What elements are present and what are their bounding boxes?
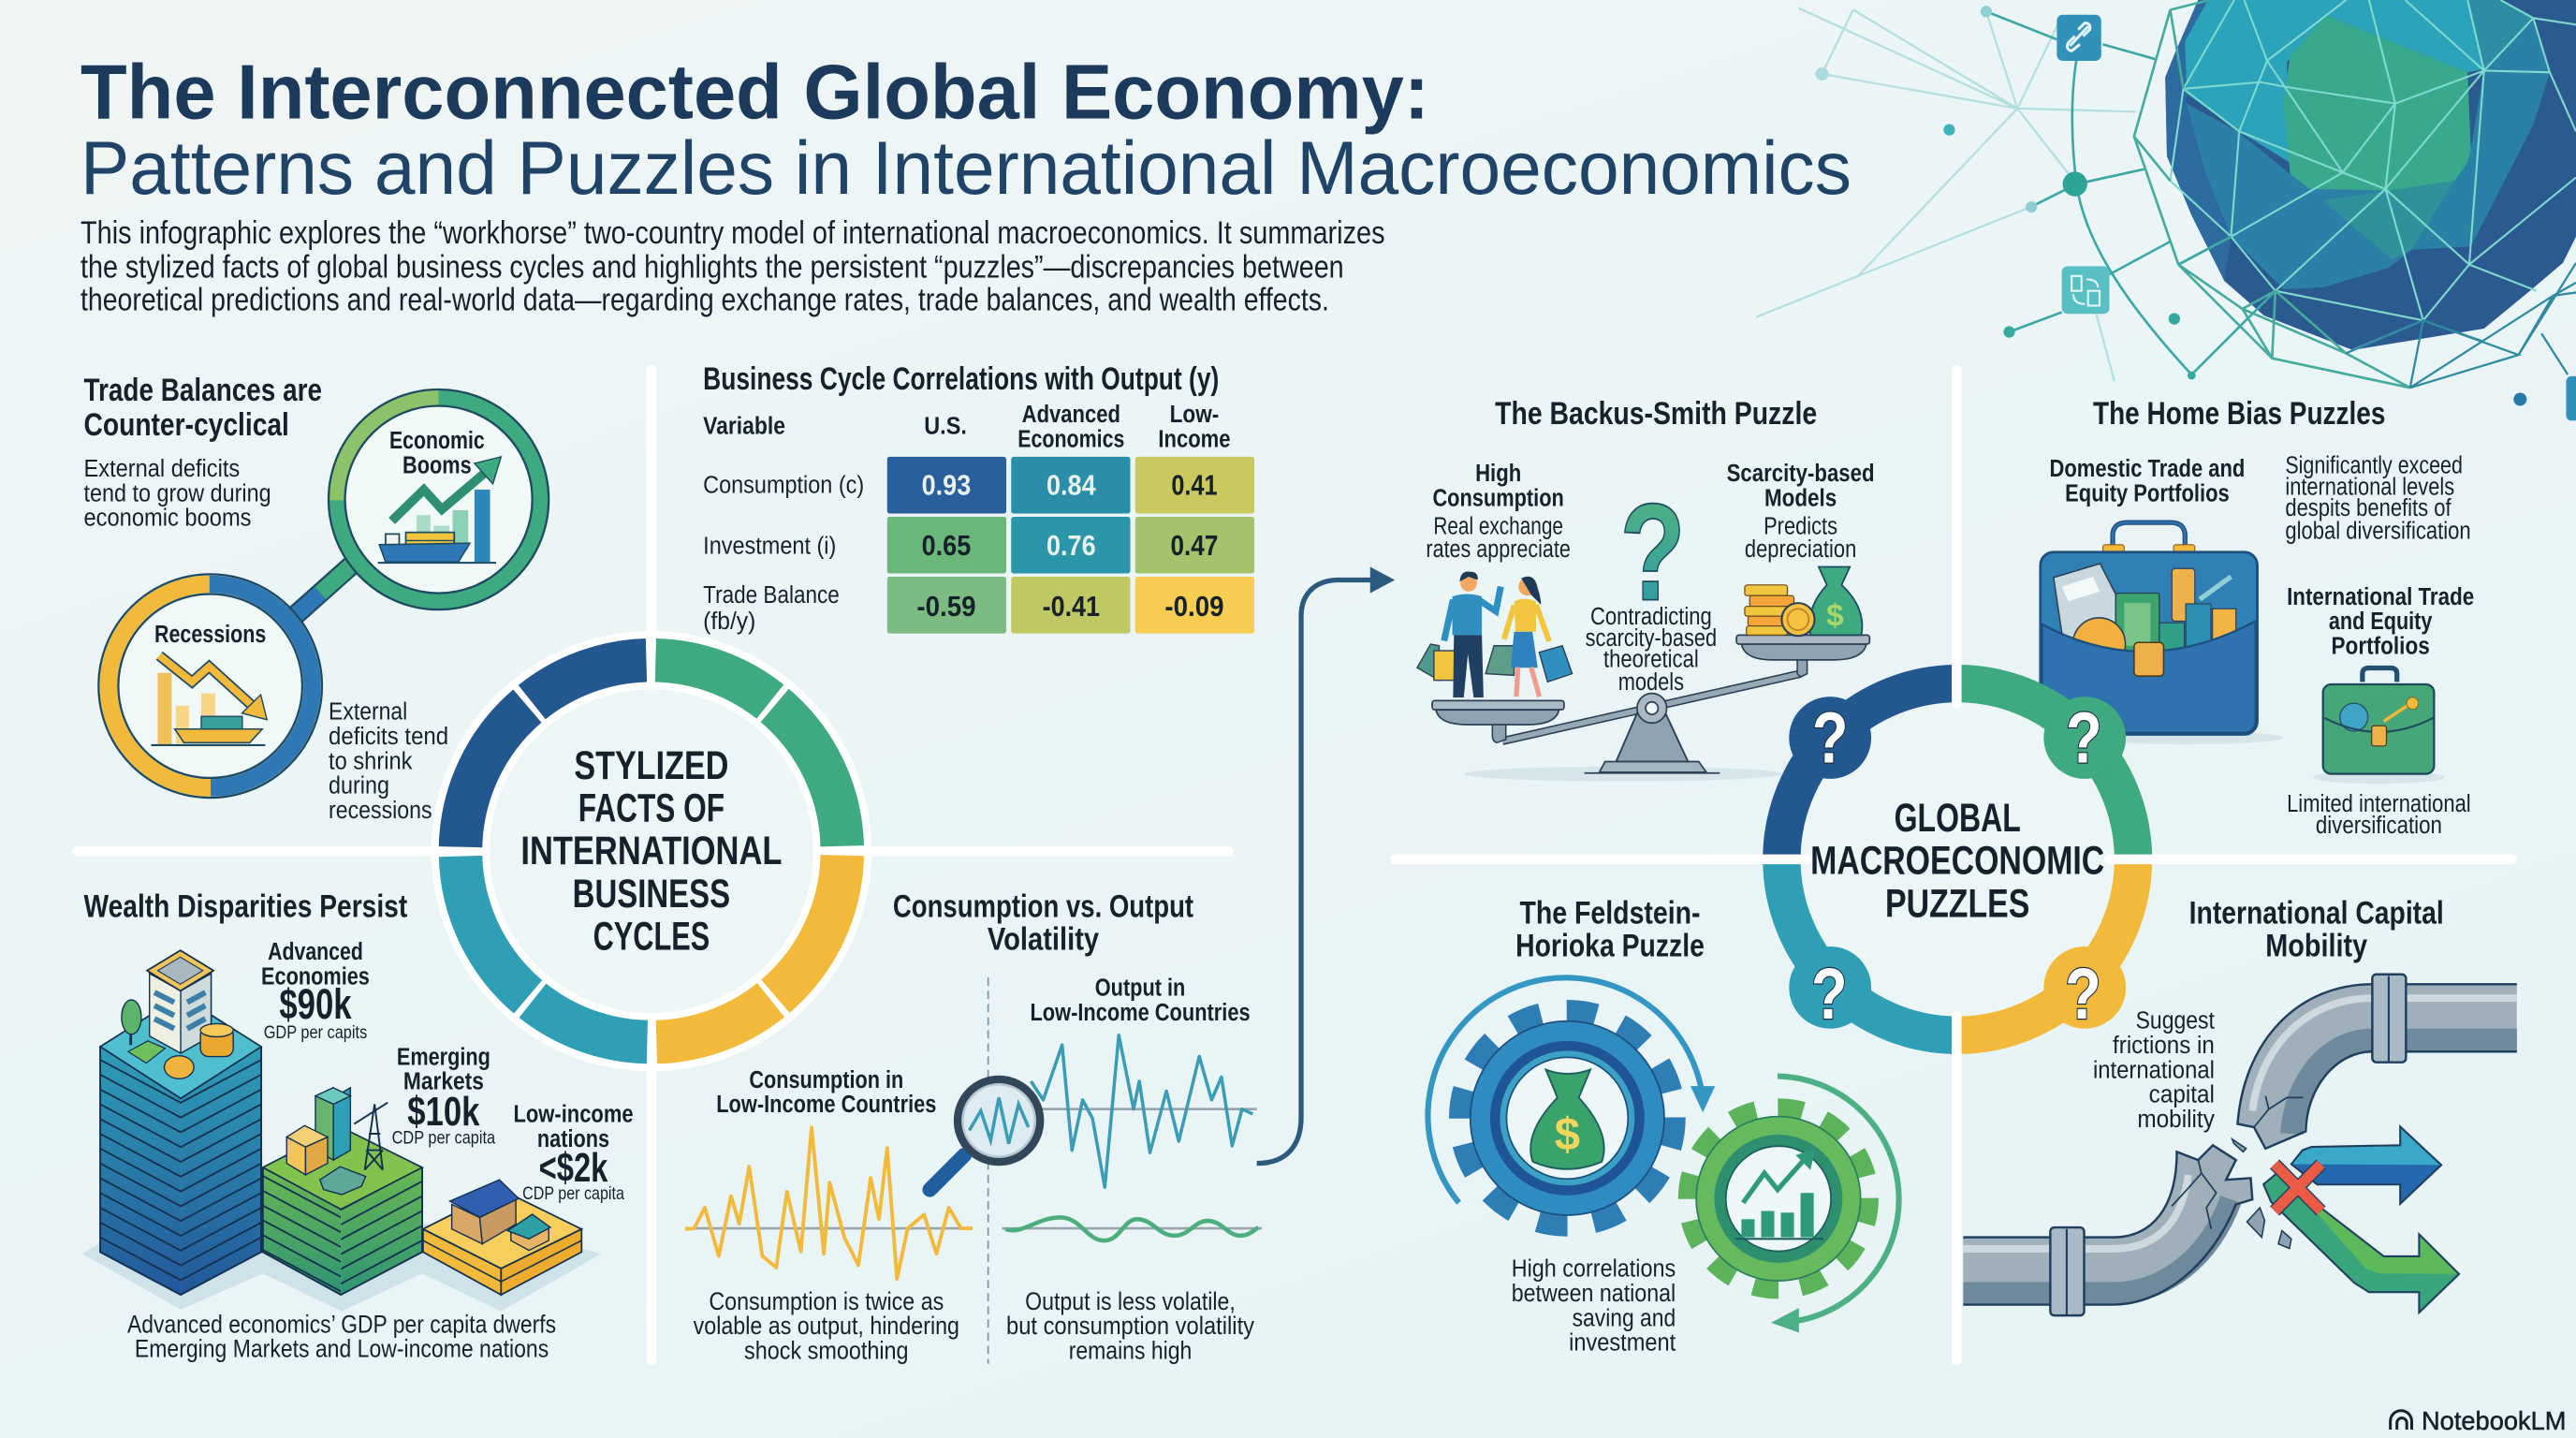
chart: low volatility line: [1003, 1217, 1262, 1240]
puzzle bubble: top right: ?: [2066, 697, 2102, 778]
text: significantly exceed: despits benefits of: [2285, 493, 2452, 521]
text: suggest frictions: Suggest: [2136, 1006, 2215, 1034]
text: high correlations: High correlations: [1512, 1255, 1676, 1283]
logo: notebooklm: NotebookLM: [2422, 1406, 2566, 1435]
mesh lines over globe: [2170, 0, 2576, 350]
arrow: green flow: [2263, 1173, 2459, 1313]
heading: [84, 373, 322, 443]
icon: upper pipe: [2237, 975, 2517, 1149]
ring title: global puzzles: [1810, 796, 2104, 926]
table row: trade balance: -0.41: [1043, 590, 1100, 623]
icon: broken fragments: [2232, 1139, 2291, 1249]
network lines near nodes: [1986, 11, 2276, 374]
text: limited diversification: [2287, 789, 2471, 839]
label: low income: [513, 1100, 634, 1204]
heading: [2189, 895, 2444, 963]
text: suggest frictions: mobility: [2137, 1105, 2216, 1133]
text: high consumption: rates appreciate: [1426, 535, 1571, 563]
heading: Horioka Puzzle: [1515, 928, 1705, 963]
panel: home bias puzzles: [2041, 396, 2474, 839]
text: contradicting: models: [1618, 668, 1684, 696]
ring: global puzzles: [1781, 683, 2133, 1035]
heading: The Home Bias Puzzles: [2093, 396, 2385, 432]
panel: wealth disparities: [82, 888, 634, 1363]
tower: advanced economies: [100, 950, 261, 1295]
label: emerging markets: Markets: [403, 1067, 484, 1095]
table header: Variable: [703, 411, 785, 439]
arrow: blue flow: [2291, 1126, 2441, 1204]
text: booms note: tend to grow during: [84, 478, 271, 506]
heading: The Feldstein-: [1519, 895, 1701, 931]
icon: blue gear with money bag: $: [1555, 1110, 1580, 1161]
caption: output: [1006, 1286, 1254, 1364]
ring title: STYLIZED: [574, 743, 728, 788]
table row: consumption: [703, 457, 1254, 513]
title: Patterns and Puzzles in International Macroeconomics: [80, 126, 1852, 211]
text: recessions note: recessions: [329, 796, 432, 824]
table row: trade balance: Trade Balance: [703, 580, 840, 609]
globe: [2165, 0, 2576, 350]
text: recessions note: deficits tend: [329, 722, 448, 750]
text: limited diversification: diversification: [2316, 811, 2442, 839]
intro text: theoretical predictions and real-world data—regarding exchange rates, trade balances, and wealth effects.: [80, 283, 1329, 318]
text: scarcity models: depreciation: [1745, 535, 1856, 563]
text: domestic portfolios: Equity Portfolios: [2065, 478, 2230, 506]
text: booms note: [84, 454, 271, 532]
table row: investment: 0.76: [1046, 529, 1096, 562]
text: recessions note: during: [329, 771, 389, 800]
label: consumption: Consumption in: [749, 1065, 903, 1093]
text: scarcity models: Scarcity-based: [1727, 459, 1875, 487]
table row: consumption: Consumption (c): [703, 471, 864, 499]
text: scarcity models: [1727, 459, 1875, 563]
ring: stylized facts: [382, 582, 920, 1121]
text: international portfolios: [2287, 582, 2474, 660]
icon: question mark: ?: [1620, 477, 1686, 630]
heading: Mobility: [2265, 928, 2367, 963]
ring title: global puzzles: MACROECONOMIC: [1810, 839, 2104, 884]
text: significantly exceed: [2285, 450, 2471, 545]
text: high consumption: High: [1475, 459, 1521, 487]
title: [80, 49, 1852, 211]
text: international portfolios: International Trade: [2287, 582, 2474, 610]
heading: The Backus-Smith Puzzle: [1495, 396, 1817, 432]
caption: output: Output is less volatile,: [1025, 1286, 1236, 1315]
heading: [1515, 895, 1705, 963]
chart: output line: [1031, 1035, 1257, 1187]
text: suggest frictions: capital: [2149, 1080, 2215, 1108]
text: significantly exceed: Significantly exceed: [2285, 450, 2463, 478]
text: high consumption: [1426, 459, 1571, 563]
caption: Advanced economics’ GDP per capita dwerfs: [127, 1309, 556, 1338]
intro text: the stylized facts of global business cycles and highlights the persistent “puzzles”—discrepancies between: [80, 250, 1344, 286]
table header: Advanced: [1022, 400, 1120, 428]
icon: small briefcase: [2313, 668, 2445, 784]
caption: output: but consumption volatility: [1006, 1311, 1254, 1340]
network node dots: [1815, 6, 2526, 406]
intro text: [80, 215, 1385, 318]
heading: Wealth Disparities Persist: [84, 888, 407, 924]
caption: [127, 1309, 556, 1363]
label: advanced economies: Economies: [261, 961, 370, 990]
table header: [703, 400, 1231, 452]
puzzle bubble: top left: ?: [1812, 697, 1848, 778]
panel: correlations table: [703, 361, 1254, 635]
caption: consumption: [694, 1286, 959, 1364]
heading: Counter-cyclical: [84, 407, 289, 443]
connector: [292, 564, 353, 618]
text: recessions note: to shrink: [329, 746, 413, 774]
icon: red x: [2275, 1164, 2321, 1211]
ring title: INTERNATIONAL: [520, 829, 782, 873]
heading: Consumption vs. Output: [893, 888, 1193, 924]
table row: investment: [703, 517, 1254, 574]
icon: coins and money bag: $: [1826, 599, 1844, 634]
text: suggest frictions: [2093, 1006, 2216, 1133]
label: low income: <$2k: [539, 1145, 608, 1191]
label: emerging markets: Emerging: [397, 1042, 490, 1070]
title: The Interconnected Global Economy:: [80, 49, 1429, 135]
label: advanced economies: [261, 937, 370, 1043]
table row: trade balance: -0.09: [1164, 590, 1224, 623]
heading: Business Cycle Correlations with Output (y): [703, 361, 1219, 397]
label: low income: CDP per capita: [522, 1184, 624, 1204]
ring title: global puzzles: PUZZLES: [1885, 881, 2029, 926]
text: international portfolios: and Equity: [2329, 607, 2433, 635]
intro text: This infographic explores the “workhorse” two-country model of international macroeconomics. It summarizes: [80, 215, 1385, 251]
caption: consumption: shock smoothing: [744, 1335, 909, 1364]
caption: output: remains high: [1069, 1335, 1192, 1364]
text: high correlations: between national: [1512, 1279, 1676, 1307]
text: scarcity models: Models: [1764, 484, 1837, 512]
label: Economic: [389, 426, 485, 454]
label: output: [1030, 974, 1251, 1026]
puzzle bubble: bottom left: ?: [1811, 954, 1848, 1034]
label: consumption: Low-Income Countries: [716, 1090, 936, 1118]
chart: consumption line: [685, 1127, 973, 1279]
text: contradicting: scarcity-based: [1586, 624, 1717, 652]
label: emerging markets: [392, 1042, 495, 1149]
text: recessions note: External: [329, 697, 407, 726]
icon: city and pylon: [286, 1088, 388, 1195]
icon: coins and money bag: [1745, 567, 1862, 636]
panel: feldstein-horioka puzzle: [1427, 895, 1899, 1357]
label: emerging markets: $10k: [407, 1089, 480, 1135]
faint network lines: [1756, 8, 2136, 381]
text: booms note: External deficits: [84, 454, 240, 482]
label: advanced economies: Advanced: [268, 937, 363, 965]
text: suggest frictions: international: [2093, 1055, 2215, 1083]
icon: ship and rising chart: [378, 457, 501, 563]
label: Booms: [402, 450, 472, 478]
label: emerging markets: CDP per capita: [392, 1129, 495, 1149]
table row: consumption: 0.93: [922, 468, 971, 501]
puzzle bubble: top right: [2043, 697, 2126, 779]
caption: Emerging Markets and Low-income nations: [135, 1334, 549, 1363]
caption: consumption: volable as output, hindering: [694, 1311, 959, 1340]
text: contradicting: theoretical: [1603, 645, 1699, 673]
icon: ship and falling chart: [151, 655, 267, 745]
text: domestic portfolios: [2049, 454, 2245, 506]
text: high correlations: investment: [1569, 1328, 1676, 1357]
table row: trade balance: [703, 577, 1254, 635]
puzzle bubble: bottom left: [1789, 946, 1871, 1034]
icon: edge tile: [2566, 376, 2576, 420]
text: high correlations: saving and: [1573, 1303, 1676, 1331]
table header: Income: [1158, 424, 1231, 452]
heading: Volatility: [988, 921, 1099, 957]
table row: trade balance: (fb/y): [703, 607, 755, 635]
text: significantly exceed: global diversification: [2285, 517, 2471, 545]
table row: consumption: 0.41: [1171, 468, 1218, 501]
label: Recessions: [154, 620, 266, 648]
heading: Trade Balances are: [84, 373, 322, 408]
mesh lines outer: [2134, 0, 2410, 388]
heading: [893, 888, 1193, 957]
panel: consumption vs output volatility: [685, 888, 1262, 1364]
icon: magnifier: [929, 1079, 1040, 1190]
icon: lower pipe: [1963, 1145, 2252, 1315]
ring title: [520, 743, 782, 959]
ground shadow: [82, 1225, 601, 1312]
puzzle bubble: bottom right: [2043, 946, 2126, 1034]
label: [389, 426, 485, 478]
circle: recessions: [98, 574, 322, 798]
icon: office building: [122, 950, 233, 1078]
panel: backus-smith puzzle: [1417, 396, 1875, 782]
label: output: Output in: [1095, 974, 1185, 1002]
panel: international capital mobility: [1963, 895, 2517, 1315]
arrow: blue arc: [1427, 977, 1715, 1203]
icon: shoppers: [1417, 572, 1573, 697]
table row: consumption: 0.84: [1046, 468, 1096, 501]
icon: document tile: [2062, 266, 2110, 314]
label: low income: Low-income: [513, 1100, 634, 1128]
icon: balance scale: [1432, 635, 1869, 782]
caption: consumption: Consumption is twice as: [709, 1286, 944, 1315]
tower: low income: [423, 1180, 581, 1295]
arrow: green arc: [1771, 1077, 1899, 1332]
label: low income: nations: [537, 1124, 609, 1152]
label: consumption: [716, 1065, 936, 1118]
tower: emerging markets: [263, 1088, 422, 1295]
ring title: CYCLES: [593, 914, 710, 959]
label: advanced economies: $90k: [279, 980, 352, 1028]
arrow: facts to puzzles: [1257, 567, 1395, 1164]
text: significantly exceed: international levels: [2285, 472, 2454, 500]
text: suggest frictions: frictions in: [2113, 1031, 2215, 1059]
mesh lines lower right: [2346, 263, 2576, 388]
text: recessions note: [329, 697, 448, 824]
text: high consumption: Consumption: [1432, 484, 1564, 512]
heading: International Capital: [2189, 895, 2444, 931]
text: booms note: economic booms: [84, 504, 252, 532]
network globe illustration: [1756, 0, 2576, 420]
ring title: global puzzles: GLOBAL: [1895, 796, 2021, 841]
label: advanced economies: GDP per capits: [264, 1023, 367, 1043]
text: limited diversification: Limited international: [2287, 789, 2471, 817]
icon: houses: [450, 1180, 550, 1251]
puzzle bubble: bottom right: ?: [2065, 954, 2101, 1034]
text: international portfolios: Portfolios: [2331, 632, 2430, 660]
table header: U.S.: [924, 411, 967, 439]
icon: link tile: [2056, 15, 2101, 61]
table row: investment: 0.47: [1171, 529, 1218, 562]
puzzle bubble: top left: [1789, 697, 1871, 779]
text: contradicting: Contradicting: [1590, 602, 1712, 630]
table row: investment: 0.65: [922, 529, 971, 562]
text: domestic portfolios: Domestic Trade and: [2049, 454, 2245, 482]
text: high consumption: Real exchange: [1433, 511, 1563, 539]
table header: Low-: [1170, 400, 1219, 428]
icon: green gear with chart: [1691, 1111, 1866, 1285]
text: high correlations: [1512, 1255, 1676, 1357]
circle: economic booms: [329, 389, 549, 609]
label: output: Low-Income Countries: [1030, 998, 1251, 1026]
icon: blue gear with money bag: [1464, 1015, 1671, 1222]
text: scarcity models: Predicts: [1764, 511, 1837, 539]
table header: Economics: [1017, 424, 1124, 452]
table row: trade balance: -0.59: [916, 590, 976, 623]
panel: trade balances: [84, 373, 549, 824]
text: contradicting: [1586, 602, 1717, 696]
ring title: FACTS OF: [578, 786, 724, 831]
icon: large briefcase: [2041, 522, 2284, 744]
table row: investment: Investment (i): [703, 531, 836, 559]
ring title: BUSINESS: [573, 872, 730, 917]
